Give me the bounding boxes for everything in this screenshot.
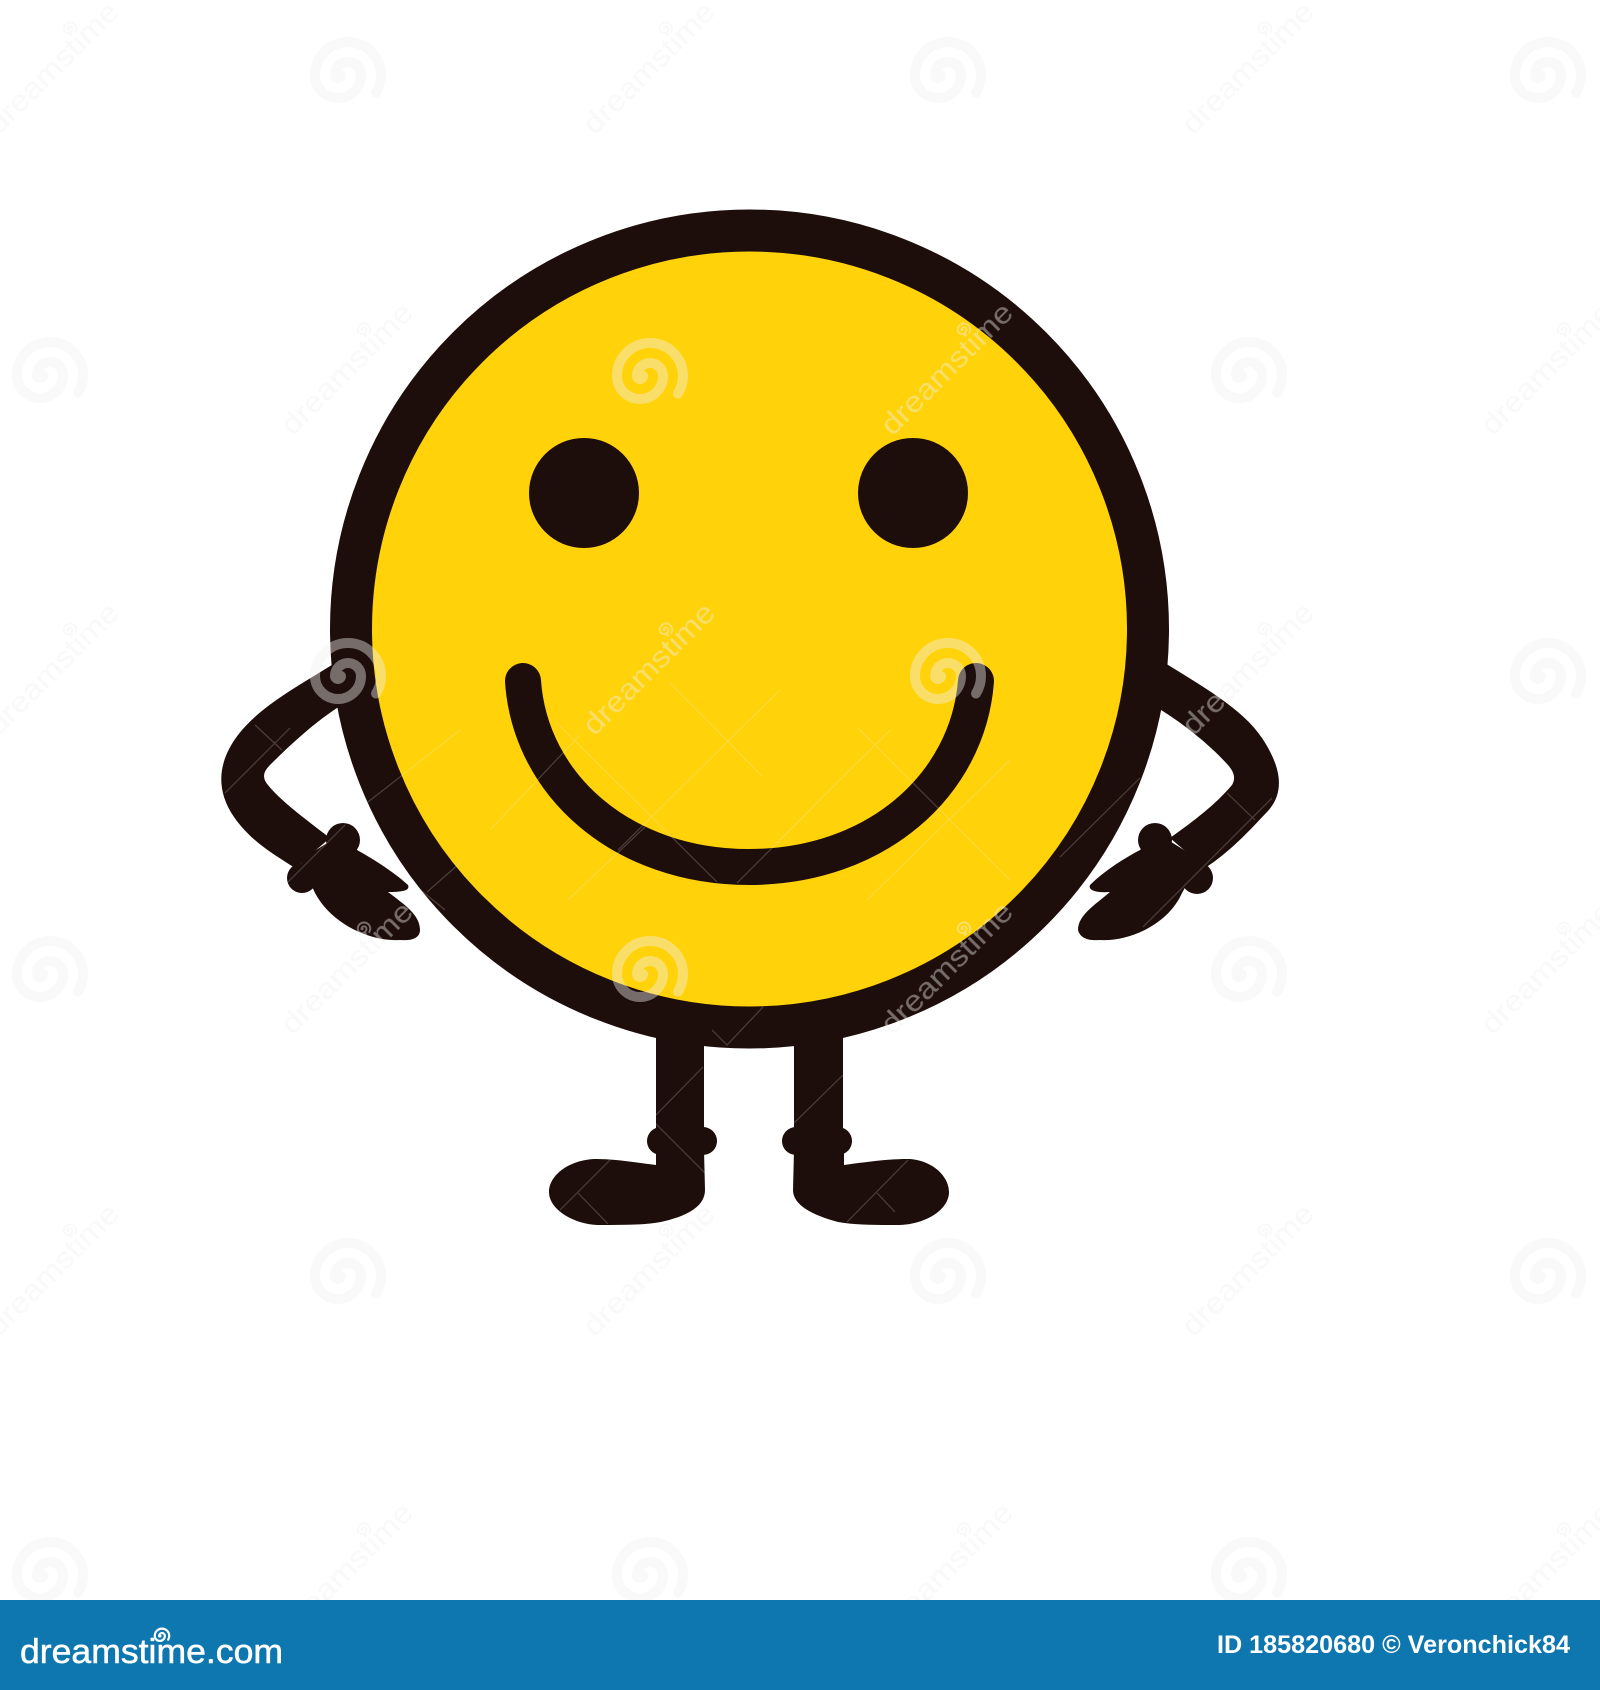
watermark text: dreamstime	[874, 1496, 1020, 1642]
image id and credit: ID 185820680 © Veronchick84	[1217, 1631, 1570, 1659]
mouth	[523, 681, 976, 867]
watermark text: dreamstime	[1175, 0, 1321, 141]
watermark hairlines	[225, 683, 1272, 1224]
watermark text: dreamstime	[274, 895, 420, 1041]
watermark text: dreamstime	[274, 296, 420, 442]
footer logo spiral	[155, 1629, 169, 1641]
right arm	[1078, 660, 1279, 940]
left leg and foot	[549, 1030, 717, 1225]
left eye	[529, 438, 639, 548]
watermark text: dreamstime	[874, 895, 1020, 1041]
watermark text: dreamstime	[274, 1496, 420, 1642]
footer bar	[0, 1600, 1600, 1690]
footer logo text: dreamstime.com	[20, 1633, 283, 1671]
watermark text: dreamstime	[1175, 1197, 1321, 1343]
watermark text: dreamstime	[576, 596, 722, 742]
watermark text: dreamstime	[576, 1197, 722, 1343]
watermark text: dreamstime	[874, 296, 1020, 442]
left arm	[221, 660, 420, 940]
head	[351, 230, 1148, 1028]
watermark text: dreamstime	[576, 0, 722, 141]
right eye	[858, 438, 968, 548]
smiley character	[221, 230, 1279, 1225]
right leg and foot	[782, 1030, 949, 1225]
watermark text: dreamstime	[1175, 596, 1321, 742]
